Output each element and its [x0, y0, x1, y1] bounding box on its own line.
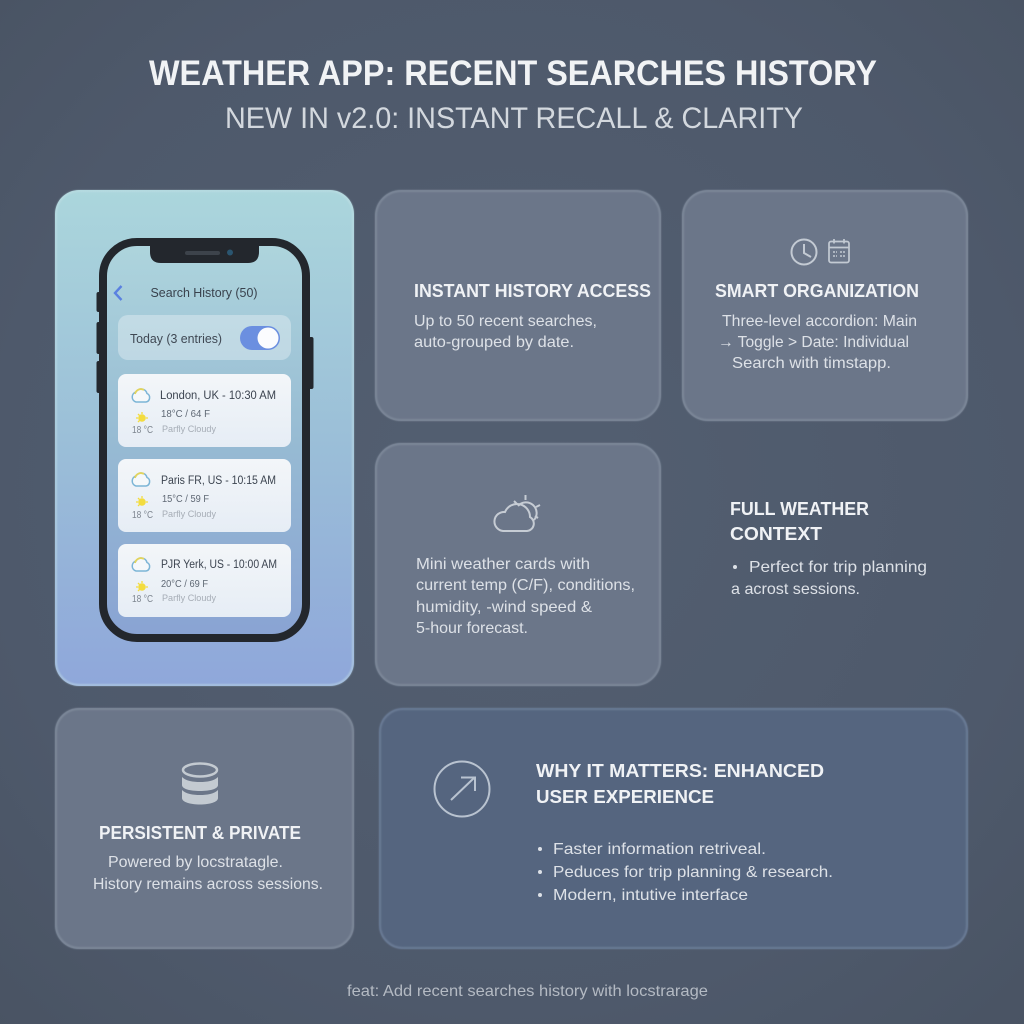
title: WEATHER APP: RECENT SEARCHES HISTORY	[149, 54, 877, 93]
body text	[718, 313, 917, 372]
panel: smart organization	[682, 190, 968, 421]
body text: → Toggle > Date: Individual	[718, 334, 909, 351]
history card: York	[118, 544, 291, 617]
history card: London: Parfly Cloudy	[162, 424, 216, 435]
body text: Mini weather cards with	[416, 556, 590, 573]
body text	[416, 556, 635, 637]
body text: Search with timstapp.	[732, 355, 891, 372]
body text: History remains across sessions.	[93, 876, 323, 893]
bullet text: Perfect for trip planning	[749, 559, 927, 576]
bullet list	[538, 841, 833, 904]
body text: Powered by locstratagle.	[108, 854, 283, 871]
body text: current temp (C/F), conditions,	[416, 577, 635, 594]
body text: auto-grouped by date.	[414, 334, 574, 351]
text block: full weather context	[730, 499, 927, 598]
screen heading: Search History (50)	[150, 285, 258, 300]
icon: calendar	[829, 239, 849, 262]
history card: York: Parfly Cloudy	[162, 593, 216, 604]
panel: mini weather cards	[375, 443, 661, 686]
heading: INSTANT HISTORY ACCESS	[414, 281, 651, 301]
bullet list: Modern, intutive interface	[553, 887, 748, 904]
history card: Paris: 18 °C	[132, 510, 153, 521]
body text: 5-hour forecast.	[416, 620, 528, 637]
history card: Paris: Parfly Cloudy	[162, 509, 216, 520]
heading: FULL WEATHER	[730, 499, 869, 519]
history card: Paris: Paris FR, US - 10:15 AM	[161, 475, 276, 487]
phone body and screen	[103, 242, 306, 638]
body text: humidity, -wind speed &	[416, 599, 592, 616]
bullet text: a acrost sessions.	[731, 581, 860, 598]
body text	[93, 854, 323, 893]
subtitle: NEW IN v2.0: INSTANT RECALL & CLARITY	[225, 102, 803, 135]
history card: York: PJR Yerk, US - 10:00 AM	[161, 559, 277, 571]
icon: database	[182, 764, 218, 804]
heading: WHY IT MATTERS: ENHANCED	[536, 761, 824, 781]
body text	[414, 313, 597, 351]
bullet text	[731, 559, 927, 598]
bullet list: Peduces for trip planning & research.	[553, 864, 833, 881]
heading: CONTEXT	[730, 524, 822, 544]
heading: PERSISTENT & PRIVATE	[99, 823, 301, 843]
today toggle row: Today (3 entries)	[130, 331, 222, 346]
history card: York: 18 °C	[132, 594, 153, 605]
bullet list: Faster information retriveal.	[553, 841, 766, 858]
history card: London: London, UK - 10:30 AM	[160, 390, 276, 402]
panel: instant history access	[375, 190, 661, 421]
phone side buttons	[96, 292, 314, 393]
history card: London: 18°C / 64 F	[161, 409, 210, 420]
icon: cloud and sun	[494, 495, 540, 531]
body text: Up to 50 recent searches,	[414, 313, 597, 330]
panel: why it matters	[379, 708, 968, 949]
history card: Paris: 15°C / 59 F	[162, 494, 209, 505]
panel: phone mockup	[55, 190, 354, 686]
today toggle row	[118, 315, 291, 360]
icon: arrow in circle	[434, 762, 490, 816]
heading: SMART ORGANIZATION	[715, 281, 919, 301]
heading: USER EXPERIENCE	[536, 787, 714, 807]
history card: York: 20°C / 69 F	[161, 579, 208, 590]
icon: clock	[792, 240, 816, 264]
heading	[730, 499, 869, 544]
history card: London	[118, 374, 291, 447]
phone notch	[150, 240, 259, 263]
footer: feat: Add recent searches history with locstrarage	[347, 983, 708, 1000]
body text: Three-level accordion: Main	[722, 313, 917, 330]
back chevron	[115, 286, 122, 300]
history card: London: 18 °C	[132, 425, 153, 436]
heading	[536, 761, 824, 807]
panel: persistent and private	[55, 708, 354, 949]
history card: Paris	[118, 459, 291, 532]
